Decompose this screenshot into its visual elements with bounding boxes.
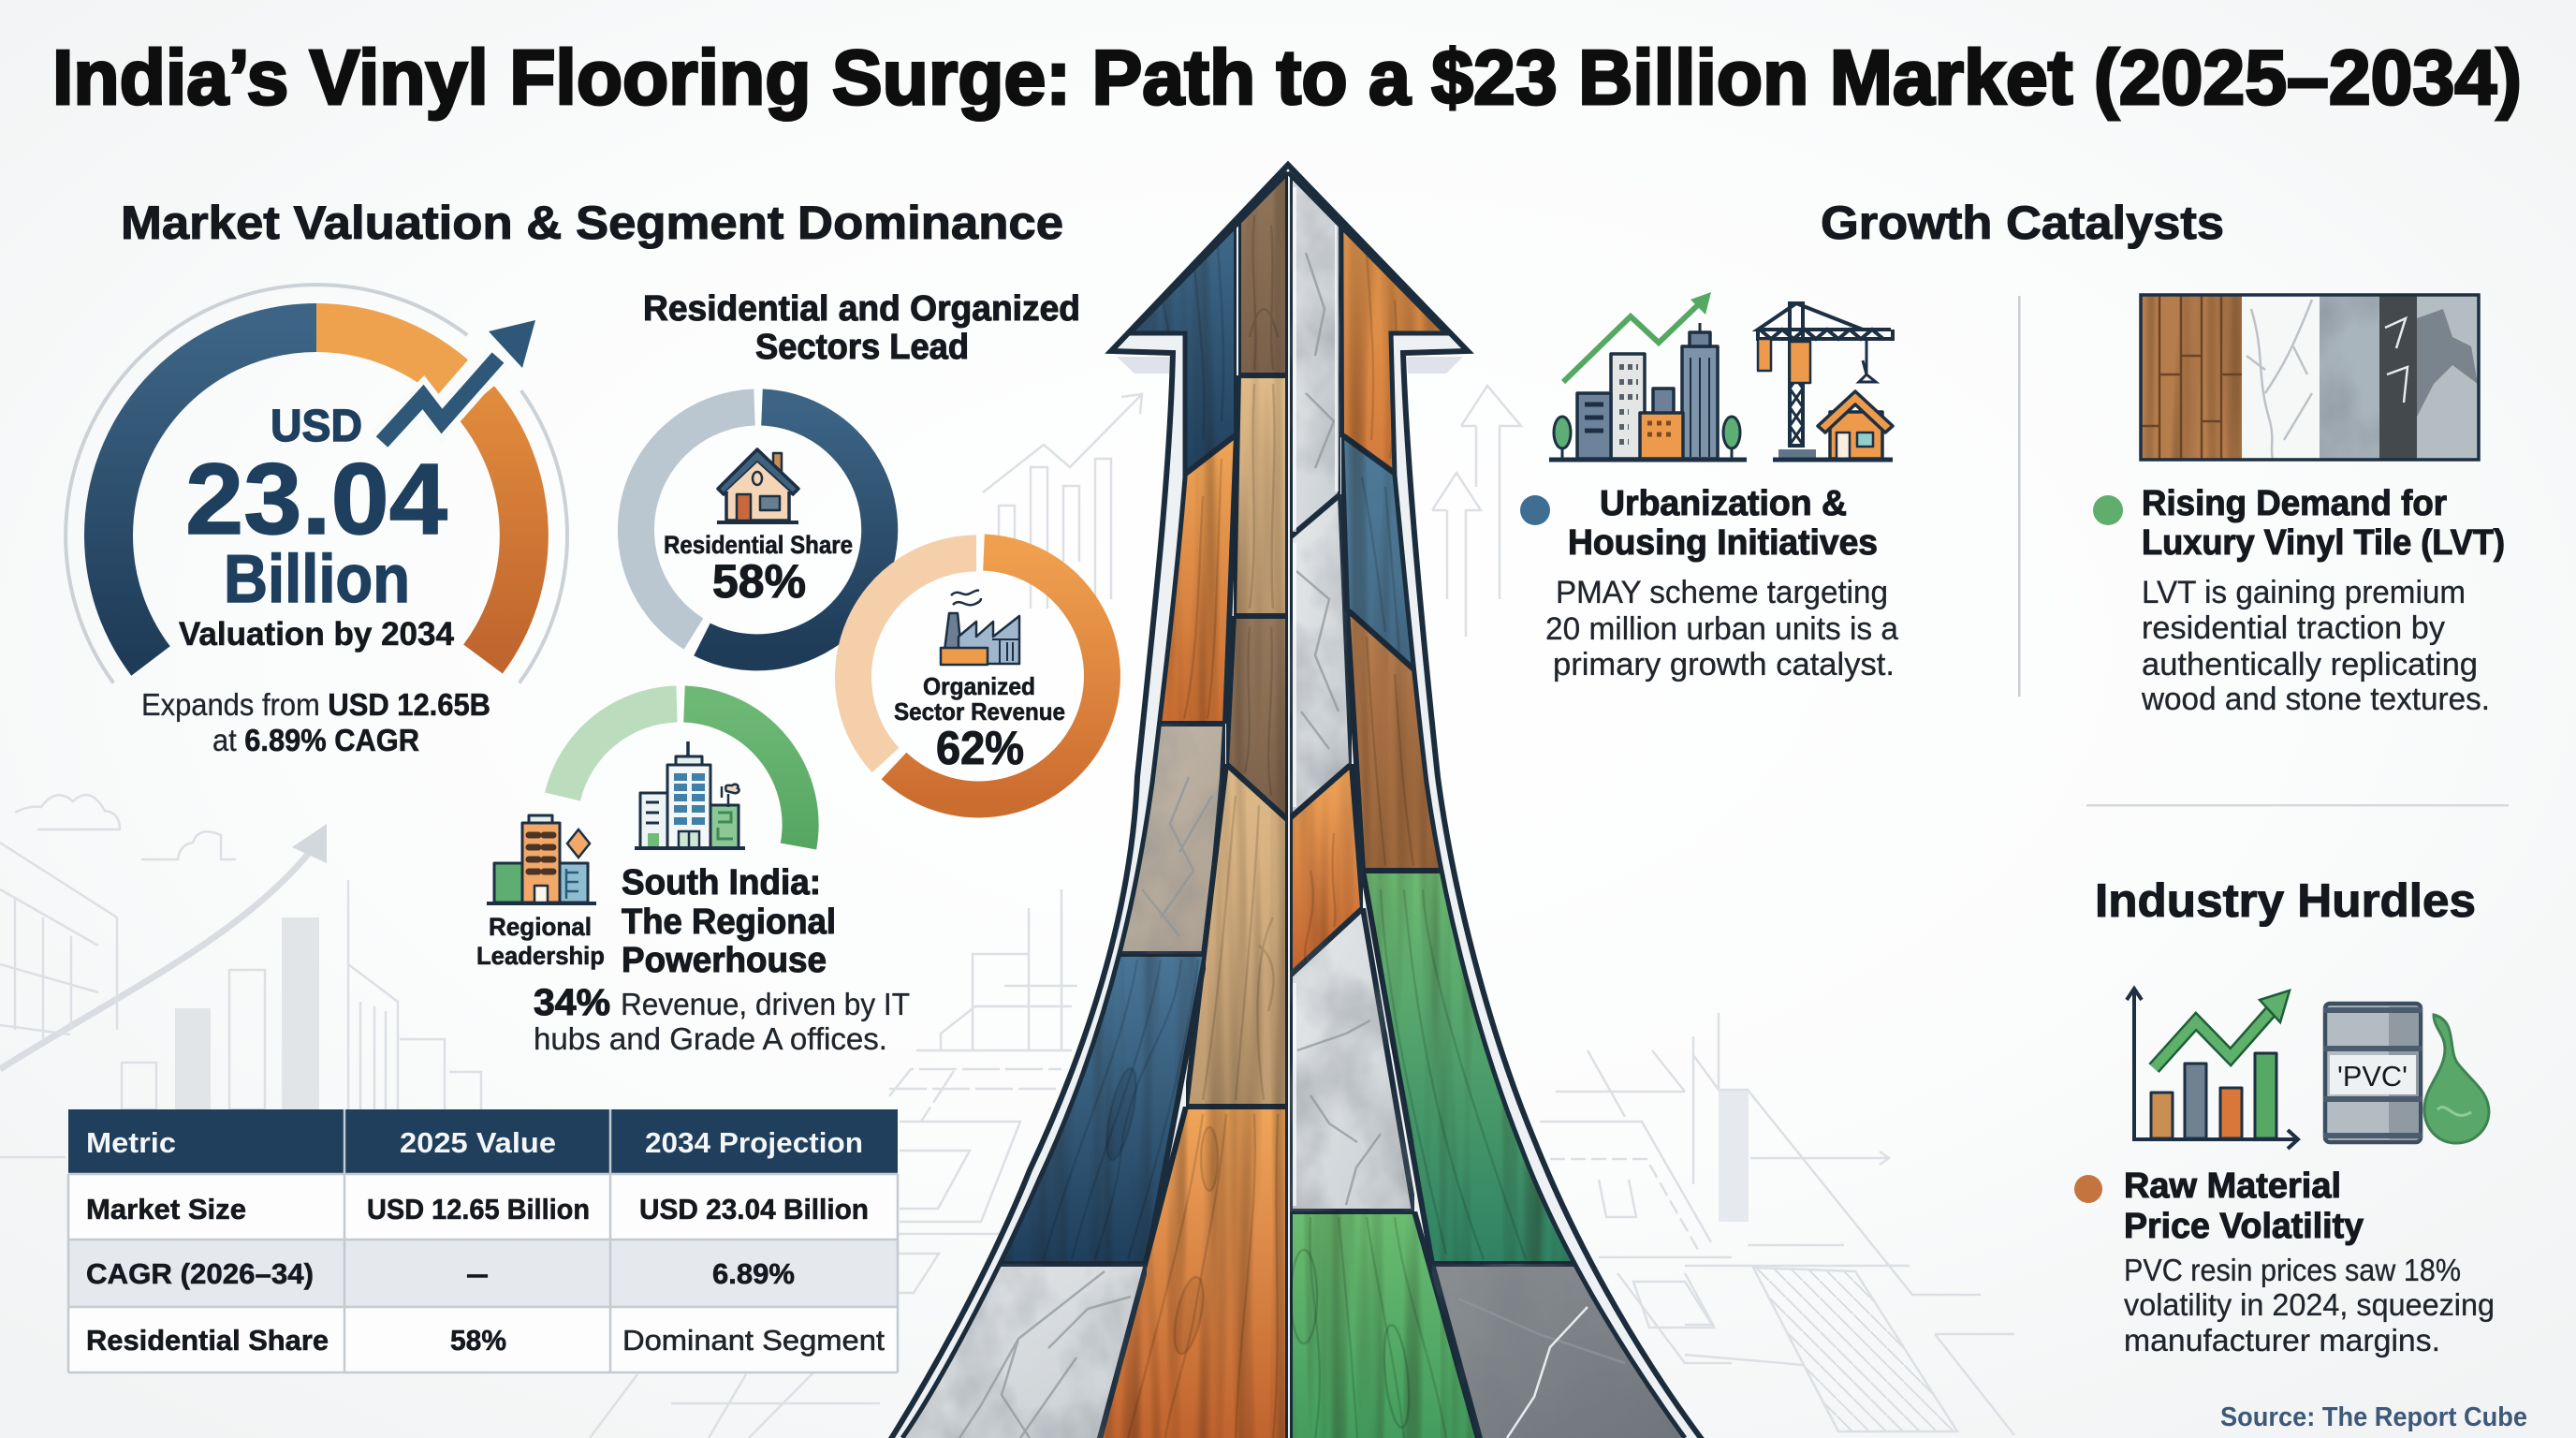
text: expansion note — [141, 687, 490, 757]
background sketch: floor plan wires right of arrow — [1540, 1013, 2014, 1435]
heading: LVT — [2142, 484, 2505, 563]
panel: luxury vinyl tile — [2093, 295, 2505, 717]
gauge USD label: USD — [271, 402, 362, 451]
tile: brown wood right — [1347, 609, 1440, 871]
arrow flooring tiles — [842, 140, 1778, 1438]
table header row — [86, 1126, 863, 1159]
source credit: Source: The Report Cube — [2220, 1402, 2527, 1432]
table row: residential share — [86, 1324, 885, 1357]
tile: white marble lower left — [905, 1264, 1147, 1438]
heading: urbanization — [1568, 484, 1878, 563]
section heading: growth catalysts: Growth Catalysts — [1821, 197, 2224, 249]
subheading: residential and organized: Residential and Organized — [643, 289, 1080, 329]
tile: green wood right — [1363, 871, 1610, 1264]
label: regional leadership: Regional — [489, 913, 592, 941]
stat text: 34% revenue: 34% — [534, 982, 610, 1023]
body: PVC prices — [2124, 1253, 2495, 1357]
body: PMAY — [1545, 575, 1898, 682]
bullet dot blue — [1520, 495, 1550, 525]
text: expansion note: at 6.89% CAGR — [212, 723, 419, 757]
background sketch: floor plan wires left of arrow — [590, 889, 1077, 1438]
tile: orange wood left — [1162, 434, 1235, 724]
tile: orange wood lower — [1099, 1107, 1288, 1438]
table row: market size: USD 12.65 Billion — [367, 1193, 590, 1225]
tile: beige stone — [1121, 724, 1225, 954]
icon: volatility bar chart — [2127, 989, 2298, 1149]
swatches: flooring materials — [2141, 295, 2479, 460]
icon: PVC barrel — [2323, 1004, 2422, 1142]
stone tile highlights — [1295, 187, 1337, 1206]
label: regional leadership: Leadership — [476, 942, 605, 970]
table row: residential share: Residential Share — [86, 1324, 329, 1357]
tile: tan wood lower — [1186, 764, 1288, 1107]
gauge: USD 23.04 billion valuation — [66, 285, 567, 683]
body: LVT: LVT is gaining premium — [2142, 575, 2466, 610]
body: PVC prices: PVC resin prices saw 18% — [2124, 1253, 2461, 1287]
tile: tan wood — [1234, 375, 1288, 616]
gauge thin outer ring — [66, 285, 567, 683]
body: LVT: wood and stone textures. — [2141, 682, 2490, 717]
tile: grey stone top — [1290, 178, 1340, 534]
table header row: 2025 Value — [400, 1126, 556, 1159]
arrow outer outline and band — [889, 165, 1704, 1438]
label: regional leadership — [476, 913, 605, 970]
section heading: market valuation: Market Valuation & Segment Dominance — [121, 197, 1063, 249]
donut pale remainder — [853, 553, 976, 760]
tile: brown wood head — [1238, 176, 1288, 375]
heading: south india: The Regional — [622, 902, 836, 942]
marble veins on stone tiles — [959, 253, 1625, 1438]
background sketch: faint chart behind centre — [983, 394, 1142, 609]
panel: urbanization and housing — [1520, 292, 1898, 682]
bullet dot green — [2093, 495, 2123, 525]
arrow shadow wedges — [1117, 357, 1463, 374]
donut: organized sector revenue 62% — [853, 552, 1102, 800]
body: PVC prices: volatility in 2024, squeezing — [2124, 1287, 2495, 1322]
subheading: residential and organized: Sectors Lead — [755, 328, 969, 367]
icon: factory — [941, 591, 1019, 665]
heading: LVT: Rising Demand for — [2142, 484, 2447, 523]
donut blue share — [702, 407, 880, 653]
body: PMAY: 20 million urban units is a — [1545, 611, 1898, 647]
tile: green wood small — [1290, 1211, 1479, 1438]
donut label: Residential Share — [664, 531, 853, 559]
body: LVT: residential traction by — [2142, 610, 2445, 646]
icon: green resin drop — [2424, 1015, 2489, 1143]
body: LVT: authentically replicating — [2142, 647, 2478, 682]
heading: urbanization: Urbanization & — [1600, 484, 1847, 523]
tile: dark grey stone — [1432, 1264, 1778, 1438]
heading: LVT: Luxury Vinyl Tile (LVT) — [2142, 523, 2505, 563]
section heading: industry hurdles: Industry Hurdles — [2095, 874, 2476, 927]
table row: CAGR: 6.89% — [712, 1257, 795, 1290]
stat text: 34% revenue — [534, 982, 910, 1056]
table row: residential share: Dominant Segment — [622, 1324, 885, 1357]
heading: south india: Powerhouse — [622, 941, 827, 980]
gauge orange arc lower — [476, 402, 524, 659]
table row: CAGR: CAGR (2026–34) — [86, 1257, 314, 1290]
table header row: Metric — [86, 1126, 176, 1159]
gauge orange arc upper — [316, 328, 452, 378]
table: metric comparison — [68, 1109, 898, 1372]
icon: office tower — [635, 741, 745, 848]
title: India’s Vinyl Flooring Surge: Path to a $23 Billion Market (2025–2034) — [52, 34, 2522, 121]
background sketch: ghost arrows right of centre — [1432, 386, 1521, 637]
stat text: 34% revenue: Revenue, driven by IT — [621, 987, 910, 1021]
gauge unit: Billion — [224, 542, 410, 617]
tile: grey stone second — [1290, 494, 1352, 818]
table backgrounds — [68, 1109, 898, 1372]
gauge dark blue arc — [109, 328, 316, 661]
arc green — [684, 704, 800, 846]
heading: raw material: Price Volatility — [2124, 1207, 2364, 1246]
arrow inner outline — [902, 172, 1685, 1438]
donut value: 58% — [712, 555, 806, 608]
icon: city skyline with growth arrow — [1549, 292, 1747, 460]
tile: dark brown wood — [1226, 616, 1288, 820]
donut label: Organized — [923, 672, 1035, 700]
table row: CAGR: – — [466, 1257, 489, 1290]
heading: raw material: Raw Material — [2124, 1167, 2341, 1206]
table grid — [68, 1109, 898, 1372]
donut grey remainder — [636, 407, 754, 634]
body: PMAY: PMAY scheme targeting — [1556, 575, 1888, 610]
donut label — [894, 672, 1065, 726]
table row: market size — [86, 1193, 869, 1225]
table header row: 2034 Projection — [645, 1126, 863, 1159]
arc pale green — [563, 704, 677, 797]
body: PVC prices: manufacturer margins. — [2124, 1323, 2440, 1357]
gauge value: 23.04 — [185, 442, 447, 555]
icon: regional building — [487, 815, 596, 903]
wood grain lines on tiles — [1044, 215, 1526, 1438]
table row: market size: Market Size — [86, 1193, 246, 1225]
heading: south india: South India: — [622, 863, 821, 902]
heading: south india — [622, 863, 836, 980]
donut orange share — [894, 552, 1102, 800]
body: PMAY: primary growth catalyst. — [1553, 647, 1895, 682]
table row: CAGR — [86, 1257, 795, 1290]
tile: slate blue wood right — [1341, 434, 1412, 663]
tile: grey stone third — [1290, 908, 1414, 1211]
icon: house — [717, 449, 798, 522]
table row: market size: USD 23.04 Billion — [639, 1193, 869, 1225]
barrel label: 'PVC' — [2337, 1060, 2408, 1093]
panel: south india regional — [476, 704, 910, 1056]
body: LVT — [2141, 575, 2490, 717]
stat text: 34% revenue: hubs and Grade A offices. — [534, 1021, 887, 1056]
central arrow of flooring tiles — [888, 161, 1705, 1438]
donut label: Sector Revenue — [894, 697, 1065, 726]
heading: urbanization: Housing Initiatives — [1568, 523, 1878, 563]
background sketch: left skyline and growth curve — [0, 795, 481, 1157]
tile: small orange wood — [1290, 764, 1363, 976]
donut value: 62% — [936, 722, 1024, 774]
heading: raw material — [2124, 1167, 2364, 1246]
tile: blue wood lower — [1002, 954, 1206, 1264]
text: expansion note: Expands from USD 12.65B — [141, 687, 490, 722]
donut: residential share 58% — [636, 407, 880, 653]
tile: orange wood head right — [1340, 228, 1441, 468]
subheading: residential and organized — [643, 289, 1080, 367]
panel: raw material volatility — [2074, 989, 2495, 1357]
bullet dot orange — [2074, 1175, 2102, 1203]
gauge caption: Valuation by 2034 — [179, 616, 455, 653]
tile: blue wood head left — [1135, 228, 1237, 469]
icon: crane and house — [1758, 303, 1893, 460]
table row: residential share: 58% — [450, 1324, 506, 1357]
gauge rising arrow — [382, 320, 535, 442]
